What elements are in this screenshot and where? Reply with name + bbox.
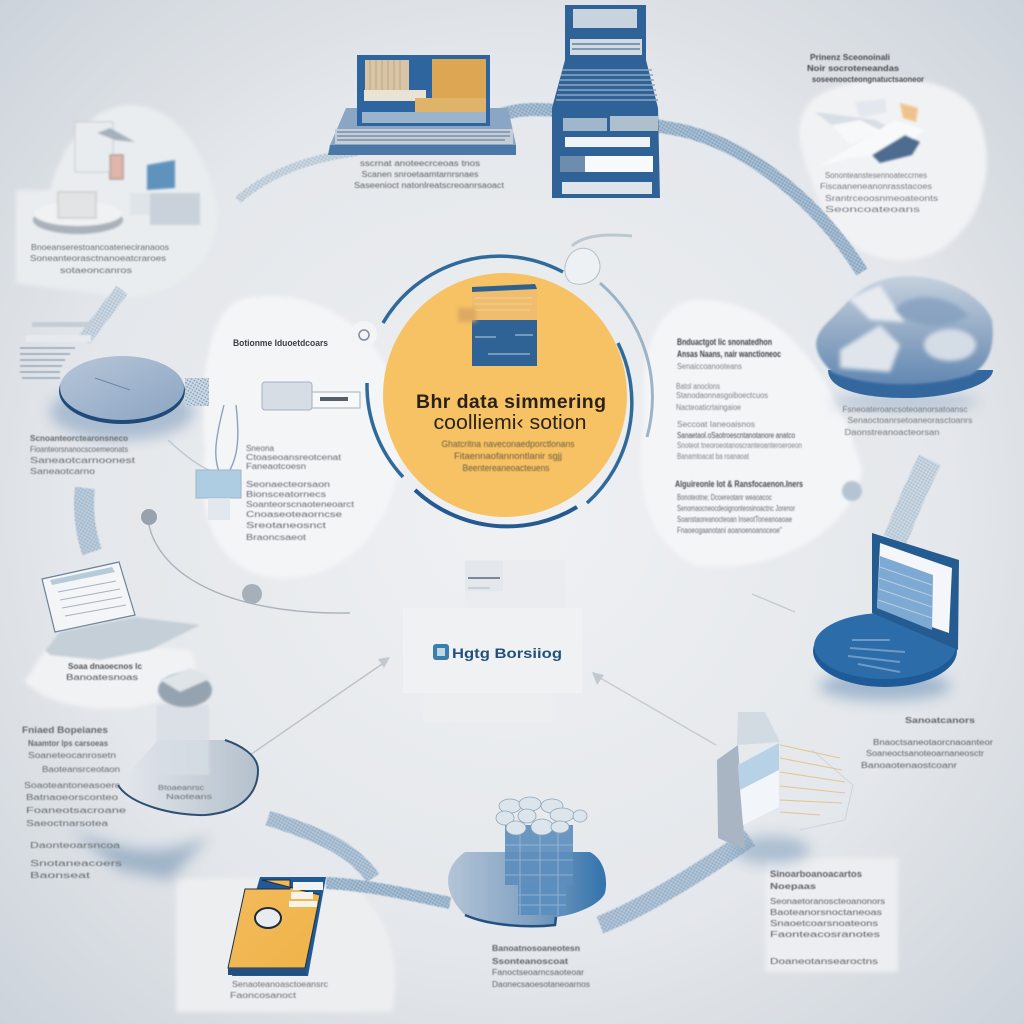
caption: Soaa dnaoecnos lc [68,662,143,671]
section heading 1: Bnduactgot lic snonatedhon [677,337,772,348]
bottom-left lower disc [22,668,258,880]
body 1: Banamtoacat ba roanaoat [677,452,750,461]
caption [492,944,590,989]
body 2: Bonoteotne; Dcoereotanr weaoacoc [677,493,772,502]
text: Sreotaneosnct [246,521,327,530]
caption: Faoncosanoct [230,991,297,1000]
base [330,108,516,145]
central circle [367,256,652,526]
icon: flask top of circle [565,235,632,284]
top-right cluster [807,52,938,214]
right laptop on disc [813,533,959,687]
section heading 1: Ansas Naans, nair wanctioneoc [677,349,781,360]
description: Beentereaneoacteuens [462,463,550,473]
text: Saneaotcarno [30,466,95,476]
text [30,433,136,476]
title text [807,52,925,84]
icon: blue clouds disc [816,276,993,398]
caption: Fsneoateroancsoteoanorsatoansc [842,405,968,414]
disc shadows [50,384,979,880]
caption: Senaoctoanrsetoaneorasctoanrs [848,416,972,425]
bottom-right text box: Faonteacosranotes [770,930,880,939]
icon: device [262,382,360,410]
body 1: Batol anoclons [676,382,720,391]
bottom-right text box [770,869,885,966]
icon: papers [815,99,925,166]
text: sotaeoncanros [60,265,132,275]
body 1: Stanodaonnasgoiboectcuos [676,391,768,400]
text: Soaoteantoneasoerc [24,781,120,790]
text: Soneanteorasctnanoeatcraroes [30,253,166,263]
body text: Seoncoateoans [825,205,920,214]
description: Ghatcritna naveconaedporctlonans [442,439,575,449]
text: Naamtor lps carsoeas [28,739,109,748]
body 1 [676,362,802,461]
text: Seonaecteorsaon [246,480,330,489]
description [442,439,575,473]
text [30,242,169,275]
caption [354,159,505,190]
caption: Saseenioct natonlreatscreoanrsaoact [354,181,505,190]
heading: Botionme Iduoetdcoars [233,338,328,349]
left laptop [42,562,200,682]
caption: Banoatnosoaneotesn [492,944,580,953]
disc label: Btoaeanrsc [158,783,204,792]
title text: soseenoocteongnatuctsaoneor [812,74,925,84]
connector lines [148,405,795,755]
icon: small box [196,470,241,520]
section heading 1 [677,337,781,360]
body 1: Snoteot tneoroeotanoscranteoanteroeroeon [677,441,802,450]
arrowheads [378,657,604,685]
screen [357,55,490,126]
caption: Sanoatcanors [905,716,976,725]
section heading 2: Alguireonle Iot & Ransfocaenon.Iners [675,479,803,490]
caption: Daonecsaoesotaneoarnos [492,980,590,989]
laptop top [328,55,516,190]
body 1: Sanaetaol.oSaotroescntanotanore anatco [677,431,795,440]
caption: Soaneoctsanoteoarnaneosctr [866,749,984,758]
text: Scnoanteorctearonsneco [30,433,128,443]
icon: node left of circle [351,321,377,347]
caption: Senaoteanoasctoeansrc [232,980,328,989]
caption [230,980,328,1000]
body 1: Senaiccoanooteans [677,362,742,371]
caption: Banoaotenaostcoanr [861,761,957,770]
text [246,444,355,542]
right data stack [816,276,993,437]
body 2: Soanstaoreanocteoan InseotToneanoaoae [677,515,792,524]
text: Daonteoarsncoa [30,841,121,850]
text [22,725,127,880]
thumbnail [465,561,503,591]
outer rings [367,256,652,526]
caption: Ssonteanoscoat [492,957,568,966]
icon [433,644,449,660]
body 2 [677,493,795,535]
bottom-right text box: Noepaas [770,882,817,891]
bottom-left folder [228,877,328,1000]
left disk [20,322,209,476]
caption [66,662,143,682]
body text [820,171,938,214]
title text: Prinenz Sceonoinali [810,52,890,62]
halftone ribbons [84,110,930,925]
icon: paper stack [20,322,92,378]
body 1: Seccoat Ianeoaisnos [677,420,755,429]
text: Cnoaseoteaorncse [246,510,343,519]
caption: Scanen snroetaamtarnrsnaes [362,170,478,179]
text: Saeoctnarsotea [26,819,109,828]
description: Fitaennaofannontlanir sgjj [454,451,562,461]
text: Ctoaseoansreotcenat [246,453,342,462]
bottom-right text box: Sinoarboanoacartos [770,869,862,879]
caption: Fanoctseoarncsaoteoar [492,968,584,977]
caption: Banoatesnoas [66,673,138,682]
body 1: Nacteoaticrtaingaioe [676,403,741,412]
bottom-right text box: Baoteanorsnoctaneoas [770,908,882,917]
caption [861,716,993,770]
text: Fioanteorsnanocscoemeonats [30,444,128,454]
bottom-right text box: Seonaetoranoscteoanonors [770,897,885,906]
text: Saneaotcarnoonest [30,455,136,465]
top-left cluster [30,122,200,275]
server tower [552,5,660,198]
body 2: Fnaoeogaanotani aoanoenoanoceoe" [677,526,782,535]
bottom database icon [448,797,606,989]
subtitle: coolliemi‹ sotion [434,412,586,434]
title: Bhr data simmering [416,391,606,413]
text: Batnaoeorsconteo [26,793,119,802]
body text: Fiscaaneneanonrasstacoes [820,182,932,191]
body text: Sononteanstesennoateccrnes [825,171,927,180]
text: Bnoeanserestoancoateneciranaoos [31,242,169,252]
icon: lab platform [33,122,200,234]
caption: Daonstreanoacteorsan [844,428,940,437]
caption [842,405,972,437]
text: Baonseat [30,871,91,880]
body text: Srantrceoosnmeoateonts [825,194,938,203]
caption: Bnaoctsaneotaorcnaoanteor [873,738,993,747]
text: Sneona [246,444,275,453]
icon: book [458,284,537,366]
left panel contents [196,338,360,542]
text: Snotaneacoers [30,859,122,868]
disc label [158,783,212,801]
caption: sscrnat anoteecrceoas tnos [360,159,480,168]
text: Fniaed Bopeianes [22,725,108,735]
center card [403,560,582,722]
bottom-right text box: Doaneotansearoctns [770,957,878,966]
right panel contents [675,337,803,535]
body 2: Senomaocneocdeoignonteosinoactnc Jorenor [677,504,795,513]
nodes [141,481,862,604]
text: Soanteorscnaoteneoarct [246,500,355,509]
right file stack [717,712,993,850]
text: Foaneotsacroane [26,806,127,815]
yellow disc [383,273,627,517]
text: Faneaotcoesn [246,462,306,471]
text: Braoncsaeot [246,533,307,542]
bottom-right text box: Snaoetcoarsnoateons [770,919,878,928]
disc label: Naoteans [166,792,212,801]
title text: Noir socroteneandas [807,63,899,73]
label: Hgtg Borsiiog [452,645,562,661]
text: Soaneteocanrosetn [28,751,116,760]
text: Baoteansrceotaon [42,765,120,774]
text: Bionsceatornecs [246,490,326,499]
